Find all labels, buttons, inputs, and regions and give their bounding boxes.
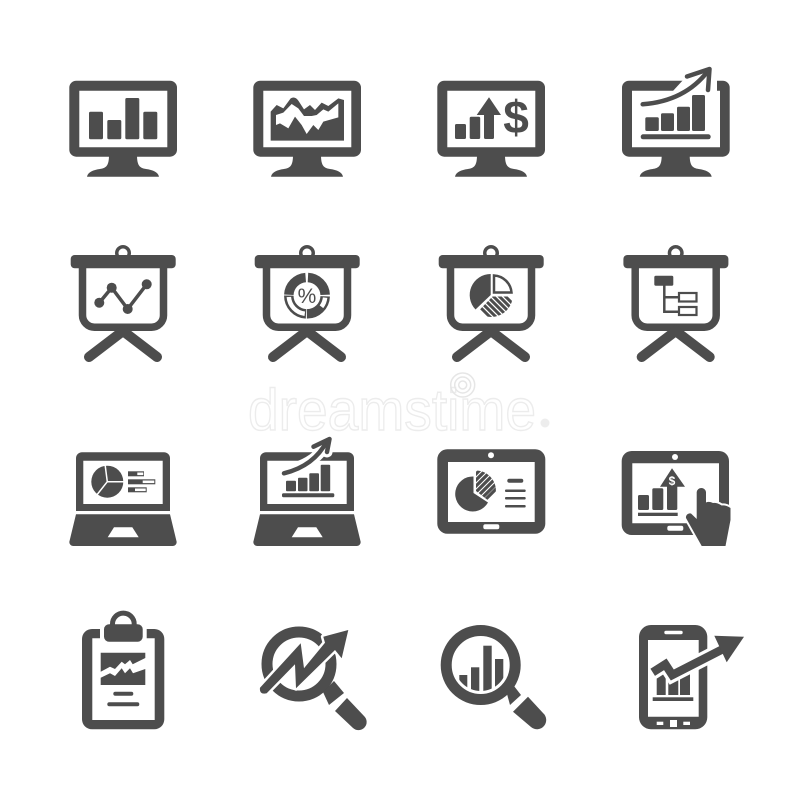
watermark wordmark: dreamstime [248,378,536,443]
text lines [107,692,139,706]
easel board [635,265,716,327]
icon: clipboard with chart [82,613,164,729]
growth arrow [653,648,725,675]
chart lower [101,668,145,685]
phone body [639,625,707,729]
icon: laptop with pie and bars [69,452,177,546]
icon: monitor with growth arrow [622,69,730,177]
clip [104,624,143,642]
baseline [653,697,693,701]
watermark [248,373,550,443]
arrow head [714,636,744,662]
up arrow [660,468,685,510]
icon: magnifier with zigzag arrow [260,630,367,730]
phone buttons [657,720,690,727]
monitor stand [271,155,343,177]
bars [89,98,157,139]
magnifier ring [446,630,515,700]
monitor stand [455,155,527,177]
monitor stand [87,155,159,177]
icon: easel with line chart [71,245,176,357]
pointing hand [686,488,730,546]
easel legs [273,331,341,357]
bars [657,668,690,695]
easel legs [642,331,710,357]
area chart [271,98,344,141]
laptop lid [76,452,170,511]
pie chart [91,464,124,498]
hatched pie slice [476,470,496,500]
easel board [266,265,348,327]
magnifier handle [335,698,367,730]
text lines [505,479,526,508]
laptop base [69,514,177,546]
arrow halo and arrow [260,630,348,694]
monitor body [622,81,730,157]
easel board [82,265,164,327]
icon: tablet with touch and rising chart [622,451,730,546]
bars [286,465,330,491]
easel hanger ring [483,245,499,261]
tablet camera [672,454,678,460]
easel top bar [71,255,176,268]
baseline [638,513,678,516]
icon: magnifier with bars [446,630,546,729]
baseline [282,493,334,497]
monitor stand [640,155,712,177]
monitor body [437,81,545,157]
icon sheet [69,66,744,730]
icon: laptop with growth arrow [253,439,361,546]
easel top bar [623,255,728,268]
monitor body [253,81,361,157]
easel hanger ring [299,245,315,261]
easel hanger ring [668,245,684,261]
easel top bar [439,255,544,268]
bars [455,117,480,139]
solid pie slice [455,476,488,511]
watermark dot [540,418,550,428]
arrow halo [300,439,329,466]
icon: easel with flow diagram [623,245,728,357]
magnifier handle [513,697,546,729]
phone speaker [664,631,683,634]
chart upper [101,653,145,672]
icon: tablet with pie and text lines [437,449,545,534]
laptop base [253,514,361,546]
bars [459,646,504,691]
growth arrow [284,439,330,473]
tablet body [622,451,729,535]
magnifier collar [323,681,344,705]
tablet camera [488,452,494,458]
percent sign: % [298,285,316,308]
up arrow [477,97,501,139]
growth arrow [643,69,710,104]
bars [638,488,663,510]
laptop lid [260,452,354,511]
easel board [450,265,532,327]
magnifier ring [267,632,331,696]
tablet home button [483,524,499,529]
easel top bar [255,255,360,268]
dollar sign: $ [503,91,529,143]
easel legs [89,331,157,357]
easel hanger ring [115,245,131,261]
solid pie slice [470,274,491,310]
icon: easel with percent donut [255,245,360,357]
horizontal bars [128,471,155,492]
clip loop [112,613,134,628]
bars [645,95,705,131]
tablet body [437,449,545,534]
magnifier collar [507,686,521,705]
watermark spiral [451,373,475,397]
monitor body [69,81,177,157]
baseline [641,134,711,139]
easel legs [457,331,525,357]
gap in monitor frame [672,79,717,92]
clipboard body [82,629,164,729]
donut chart [287,275,327,316]
hatched pie slice [480,296,512,317]
tablet home button [667,526,683,531]
arrow halo [653,648,725,675]
icon: monitor with rising bars and dollar [437,81,545,177]
flow diagram [654,276,696,315]
small dollar: $ [669,474,676,488]
outlined pie slice [494,276,512,292]
icon: monitor with bar chart [69,81,177,177]
icon: smartphone with growth arrow [639,625,744,729]
line chart [94,279,152,314]
clip halo [100,624,147,639]
icon: monitor with area chart [253,81,361,177]
icon: easel with pie chart [439,245,544,357]
white band in chart [276,103,338,134]
